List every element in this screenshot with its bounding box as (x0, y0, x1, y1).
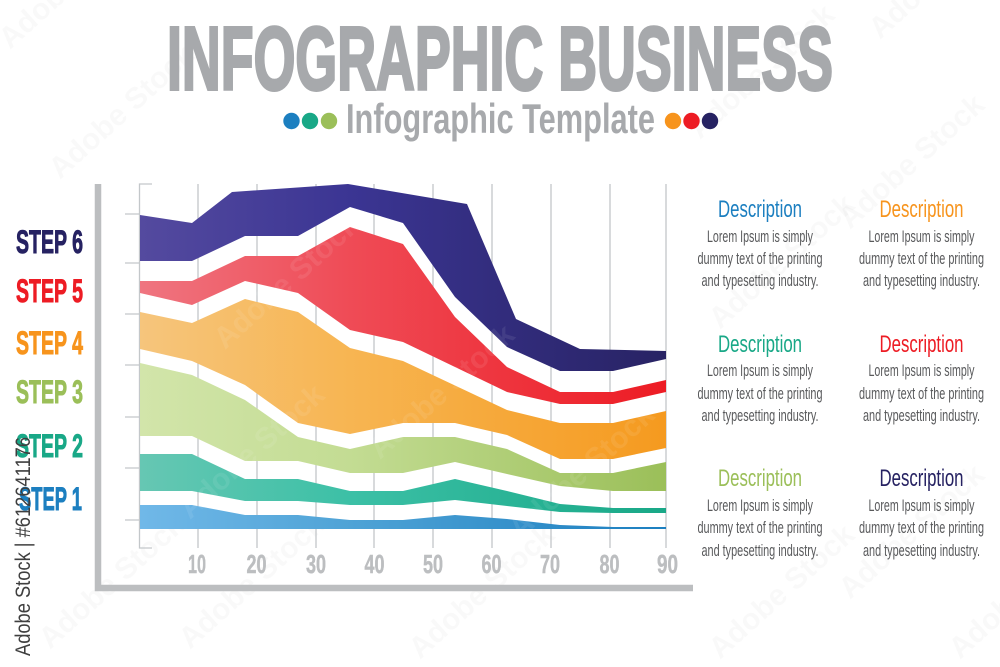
x axis labels: 20 (246, 549, 266, 579)
description: teal (698, 331, 822, 425)
description: red: Description (880, 331, 964, 358)
icon: left dots (283, 113, 337, 129)
x axis labels: 80 (600, 549, 620, 579)
chart axes and grid (125, 184, 666, 548)
x axis labels: 10 (188, 549, 206, 579)
description: red (859, 331, 984, 425)
description: blue: Description (718, 196, 802, 223)
label: step 4: STEP 4 (16, 325, 83, 361)
x axis labels: 90 (657, 549, 678, 579)
x axis labels: 30 (306, 549, 326, 579)
description: teal: dummy text of the printing (698, 385, 822, 403)
x axis labels (188, 549, 678, 579)
x axis labels: 70 (540, 549, 560, 579)
band: step 3 (140, 363, 666, 491)
description: teal: Lorem Ipsum is simply (707, 362, 813, 380)
text: Adobe Stock (503, 398, 661, 545)
x axis labels: 50 (423, 549, 443, 579)
icon: right dots (665, 113, 718, 129)
description: green: Lorem Ipsum is simply (707, 497, 813, 515)
band: step 6 (140, 184, 666, 371)
description: teal: and typesetting industry. (702, 407, 818, 425)
description: blue: dummy text of the printing (698, 250, 822, 268)
chart frame (98, 184, 693, 588)
area chart (125, 184, 666, 548)
text: Adobe Stock (208, 208, 366, 355)
step labels (16, 224, 83, 517)
band: step 5 (140, 227, 666, 404)
subtitle row (283, 95, 718, 142)
description: green: and typesetting industry. (702, 542, 818, 560)
description: navy (859, 465, 984, 560)
band: step 4 (140, 299, 666, 459)
text: Adobe Stock (363, 318, 521, 465)
label: step 3: STEP 3 (16, 374, 83, 410)
label: step 5: STEP 5 (16, 273, 83, 309)
description: navy: Description (880, 465, 964, 492)
x axis labels: 40 (364, 549, 384, 579)
description: green: Description (718, 465, 802, 492)
label: step 6: STEP 6 (16, 224, 83, 260)
subtitle: Infographic Template (346, 95, 655, 142)
description: orange (859, 196, 984, 290)
description: blue: Lorem Ipsum is simply (707, 228, 813, 246)
x axis labels: 60 (482, 549, 502, 579)
band: step 1 (140, 505, 666, 529)
label: step 1: STEP 1 (19, 481, 82, 517)
description: blue (698, 196, 822, 290)
band: step 2 (140, 454, 666, 513)
description: green (698, 465, 822, 560)
label: step 2: STEP 2 (16, 428, 83, 464)
description: orange: Description (880, 196, 964, 223)
description: green: dummy text of the printing (698, 519, 822, 537)
description: blue: and typesetting industry. (702, 272, 818, 290)
description: teal: Description (718, 331, 802, 358)
text: Adobe Stock (173, 378, 331, 525)
stock watermark text: Adobe Stock | #612641176 (12, 437, 35, 656)
